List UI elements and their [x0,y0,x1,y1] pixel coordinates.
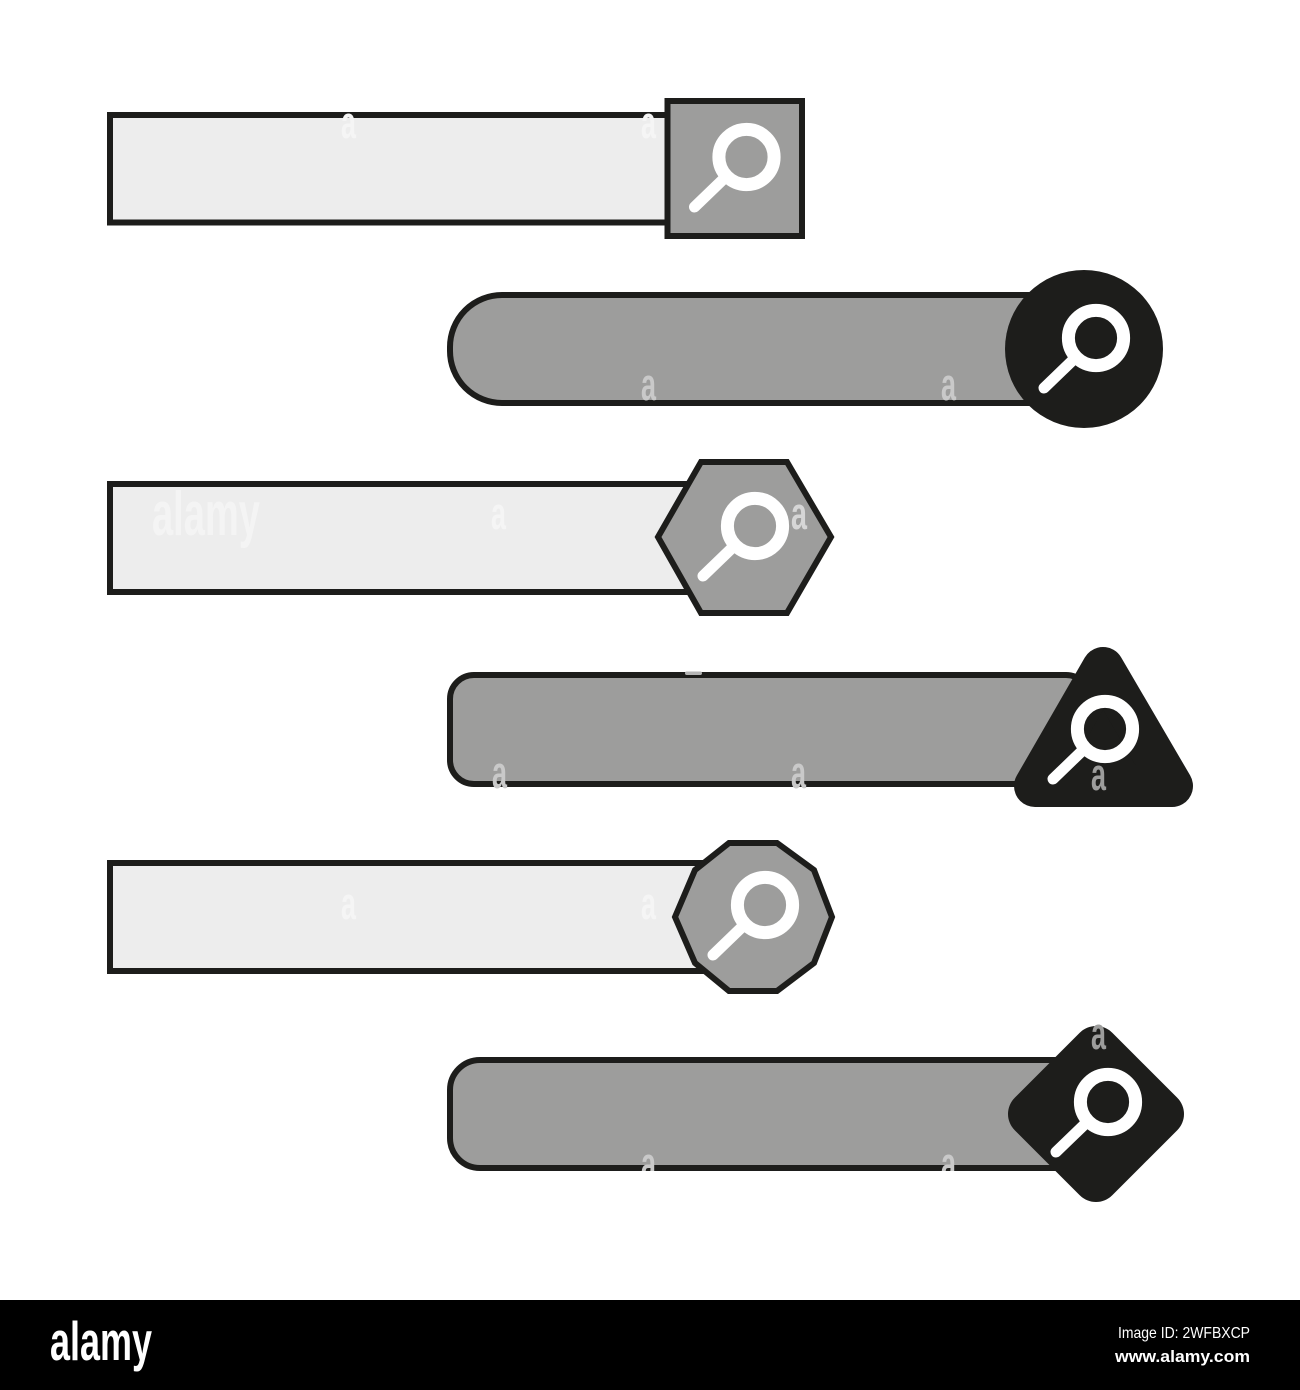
watermarks on bar 1: a [641,97,657,148]
search bar 6: diamond button [450,1008,1161,1189]
icon: magnifier 4 [1053,701,1133,779]
bar 6 field [450,1060,1090,1168]
search bar 1: square button [110,97,802,236]
search bar 4: triangle button [450,668,1172,800]
website: www.alamy.com [1114,1347,1250,1366]
watermarks on bar 5: a [641,878,657,929]
bar 5 decagon button [675,843,832,991]
bar 5 field [110,863,720,971]
watermarks on bar 1 [341,97,657,148]
watermarks on bar 1: a [341,97,357,148]
watermarks on bar 6: a [941,1138,957,1189]
bar 2 field [450,295,1090,403]
search bar 3: hexagon button [110,462,831,613]
watermarks on bar 6: a [641,1138,657,1189]
watermark letter on bar 3: a [491,488,507,539]
image id: Image ID: 2WFBXCP [1118,1325,1250,1342]
bar 6 diamond button [1031,1049,1161,1179]
watermarks on bar 2 [641,359,957,410]
search bar 2: circle button [450,270,1163,428]
watermarks on bar 4: a [791,747,807,798]
watermarks on bar 2: a [641,359,657,410]
icon: magnifier 1 [694,129,774,207]
bar 4 field [450,675,1090,784]
watermarks on bar 4: a [492,747,508,798]
bar 4 triangle button [1035,668,1172,786]
watermarks on bar 5: a [341,878,357,929]
watermarks on bar 4 [492,747,807,798]
bar 3 field [110,484,710,592]
icon: magnifier 2 [1044,310,1124,388]
icon: magnifier 3 [703,498,783,576]
bar 1 square button [668,101,802,236]
bar 2 circle button [1005,270,1163,428]
watermarks on bar 2: a [941,359,957,410]
watermark on hexagon: a [791,488,808,539]
icon: magnifier 5 [713,877,793,955]
footer logo: alamy [50,1310,152,1372]
watermarks on bar 5 [341,878,657,929]
bar 3 hexagon button [658,462,831,613]
watermark on diamond: a [1091,1008,1107,1059]
footer band [0,1300,1300,1390]
watermark fragment on bar 4 top edge [685,672,702,675]
watermarks on bar 6 [642,1154,954,1171]
watermark on triangle: a [1091,749,1107,800]
bar 1 field [110,115,671,222]
watermark logo on bar 3: alamy [152,480,260,549]
search bar 5: decagon button [110,843,832,991]
icon: magnifier 6 [1056,1074,1136,1152]
